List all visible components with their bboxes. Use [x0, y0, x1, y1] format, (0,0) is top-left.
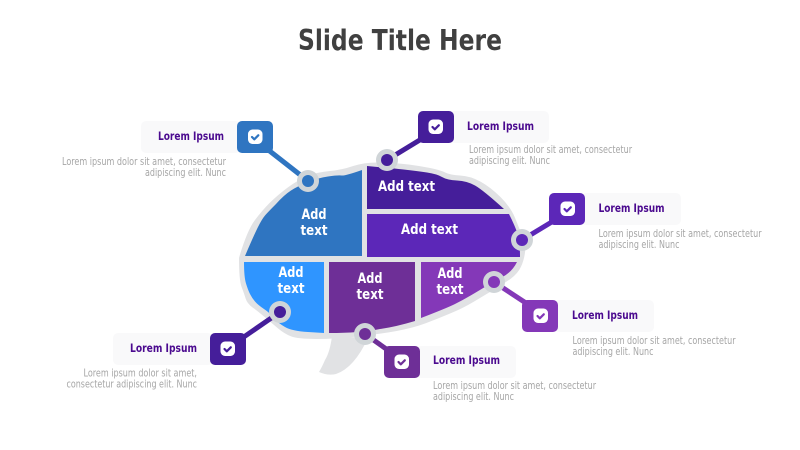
callout: top centre [376, 111, 633, 171]
label pill [416, 346, 516, 378]
connector [238, 312, 280, 341]
callout: right upper [511, 193, 762, 251]
icon: check box [210, 333, 246, 365]
label pill [581, 193, 681, 225]
connector [387, 135, 428, 160]
node [269, 301, 291, 323]
label: Lorem Ipsum [130, 341, 197, 355]
connector [494, 282, 532, 307]
add text: blue segment [300, 207, 328, 239]
description: Lorem ipsum dolor sit amet, consectetur [469, 144, 633, 156]
add text: light purple segment [436, 266, 464, 298]
node [483, 271, 505, 293]
label pill [141, 121, 241, 153]
label pill [113, 333, 213, 365]
description: adipiscing elit. Nunc [598, 239, 680, 251]
description: adipiscing elit. Nunc [433, 391, 514, 403]
node [376, 149, 398, 171]
label: Lorem Ipsum [433, 353, 500, 367]
brain diagram [240, 163, 524, 375]
description [66, 368, 197, 390]
add text: purple segment: Add [358, 271, 382, 287]
add text: purple segment: text [356, 287, 384, 303]
segment: dark purple top [367, 166, 504, 209]
callout: bottom centre [354, 323, 597, 403]
description: Lorem ipsum dolor sit amet, consectetur [62, 156, 227, 168]
label: Lorem Ipsum [572, 308, 638, 322]
description [598, 228, 762, 251]
add text: light blue segment: Add [278, 265, 304, 281]
label pill [554, 300, 654, 332]
description [572, 335, 736, 358]
segment: blue top-left [245, 170, 362, 256]
node [511, 229, 533, 251]
add text: light purple segment: text [436, 282, 464, 298]
title: Slide Title Here [298, 24, 502, 57]
callout: top left [62, 121, 319, 192]
segment: violet middle [367, 214, 520, 257]
description: adipiscing elit. Nunc [572, 346, 654, 358]
description [62, 156, 227, 179]
brain outline [240, 163, 524, 338]
add text: violet segment: Add text [401, 222, 458, 238]
icon: check box [384, 346, 420, 378]
add text: light blue segment [278, 265, 305, 297]
label: Lorem Ipsum [467, 119, 534, 133]
add text: blue segment: Add [302, 207, 326, 223]
node [354, 323, 376, 345]
icon: check box [549, 193, 585, 225]
segment: light blue lower-left [244, 262, 324, 333]
add text: light blue segment: text [278, 281, 305, 297]
icon: check box [522, 300, 558, 332]
add text: blue segment: text [300, 223, 328, 239]
description: Lorem ipsum dolor sit amet, [84, 368, 197, 380]
description: Lorem ipsum dolor sit amet, consectetur [433, 380, 597, 392]
node [297, 170, 319, 192]
segment: light purple lower-right [421, 262, 517, 318]
description: adipiscing elit. Nunc [145, 167, 226, 179]
connector [262, 145, 308, 181]
description: consectetur adipiscing elit. Nunc [66, 378, 197, 390]
segment: purple lower-middle [329, 262, 415, 333]
add text: light purple segment: Add [438, 266, 462, 282]
icon: check box [418, 111, 454, 143]
callout: right lower [483, 271, 736, 358]
add text: purple segment [356, 271, 384, 303]
connector [365, 334, 392, 353]
callout: bottom left [66, 301, 291, 390]
connector [522, 217, 560, 240]
label: Lorem Ipsum [598, 201, 665, 215]
description [469, 144, 633, 167]
description: Lorem ipsum dolor sit amet, consectetur [572, 335, 736, 347]
label: Lorem Ipsum [158, 129, 224, 143]
description: adipiscing elit. Nunc [469, 155, 550, 167]
icon: check box [237, 121, 273, 153]
label pill [449, 111, 549, 143]
description [433, 380, 597, 403]
brain tail [319, 336, 368, 375]
add text: dark purple segment: Add text [378, 179, 435, 195]
